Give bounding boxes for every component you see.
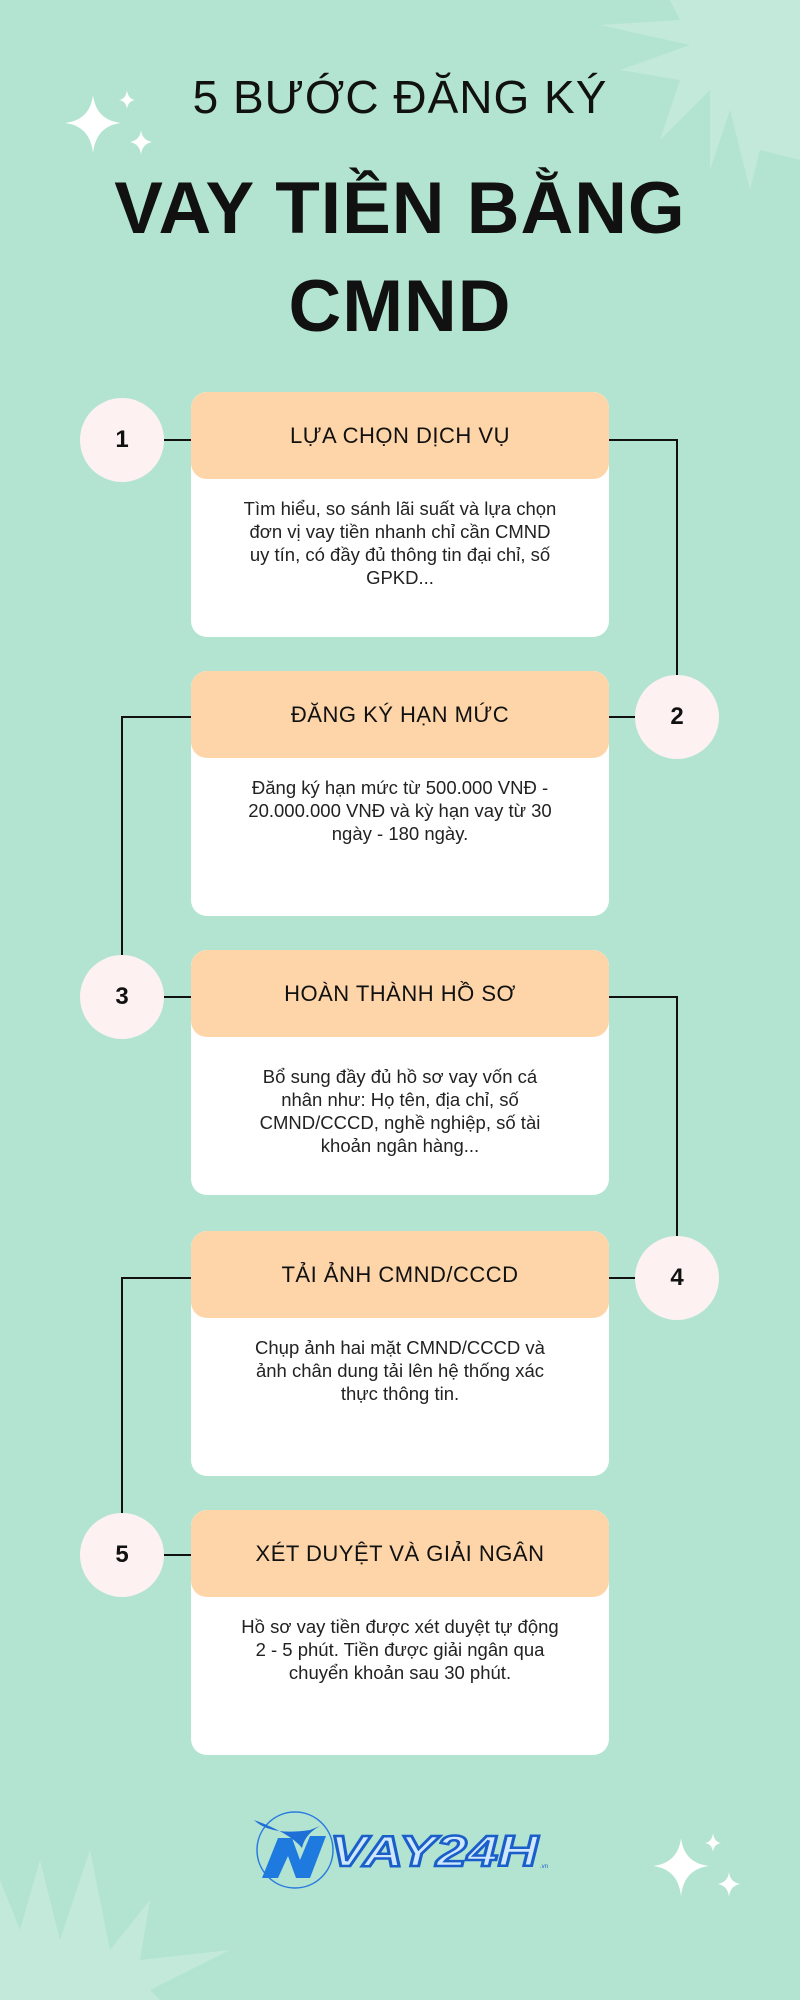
step 5 circle — [80, 1513, 164, 1597]
step 4 card: TẢI ẢNH CMND/CCCD — [281, 1262, 519, 1286]
step 1 circle — [80, 398, 164, 482]
step 3 card: Bổ sung đầy đủ hồ sơ vay vốn cá nhân như: Họ tên, địa chỉ, số CMND/CCCD, nghề nghiệp, số tài khoản ngân hàng... — [260, 1066, 540, 1156]
step 5 circle: 5 — [115, 1541, 129, 1568]
step 1 card: Tìm hiểu, so sánh lãi suất và lựa chọn đơn vị vay tiền nhanh chỉ cần CMND uy tín, có đầy đủ thông tin đại chỉ, số GPKD... — [244, 498, 556, 588]
step 4 circle: 4 — [670, 1264, 684, 1291]
icon: sparkles bottom right — [654, 1834, 740, 1896]
title main — [114, 167, 686, 347]
decoration: starburst bottom left — [0, 1851, 229, 2000]
step 5 card: XÉT DUYỆT VÀ GIẢI NGÂN — [256, 1540, 544, 1566]
icon: sparkles top left — [66, 90, 152, 154]
step 1 card: LỰA CHỌN DỊCH VỤ — [290, 422, 510, 448]
step 2 circle — [635, 675, 719, 759]
step 1 card — [191, 392, 609, 637]
step 3 circle: 3 — [115, 983, 129, 1010]
step 4 card: Chụp ảnh hai mặt CMND/CCCD và ảnh chân dung tải lên hệ thống xác thực thông tin. — [255, 1337, 545, 1404]
logo: .vn — [540, 1864, 548, 1870]
step 2 card — [191, 671, 609, 916]
step 2 circle: 2 — [670, 703, 684, 730]
step 2 card: Đăng ký hạn mức từ 500.000 VNĐ - 20.000.000 VNĐ và kỳ hạn vay từ 30 ngày - 180 ngày. — [248, 777, 552, 844]
title main: CMND — [289, 266, 511, 347]
step 3 card — [191, 950, 609, 1195]
step 3 card: HOÀN THÀNH HỒ SƠ — [284, 980, 516, 1006]
step 5 card — [191, 1510, 609, 1755]
logo: VAY24H — [330, 1827, 540, 1876]
step 5 card: Hồ sơ vay tiền được xét duyệt tự động 2 - 5 phút. Tiền được giải ngân qua chuyển khoản sau 30 phút. — [241, 1616, 559, 1683]
title main: VAY TIỀN BẰNG — [114, 168, 686, 249]
logo — [254, 1811, 548, 1889]
step 4 circle — [635, 1236, 719, 1320]
step 3 circle — [80, 955, 164, 1039]
decoration: starburst top right — [602, 0, 800, 189]
step 2 card: ĐĂNG KÝ HẠN MỨC — [291, 702, 509, 726]
step 1 circle: 1 — [115, 426, 129, 453]
step 4 card — [191, 1231, 609, 1476]
title line 1: 5 BƯỚC ĐĂNG KÝ — [193, 71, 607, 123]
